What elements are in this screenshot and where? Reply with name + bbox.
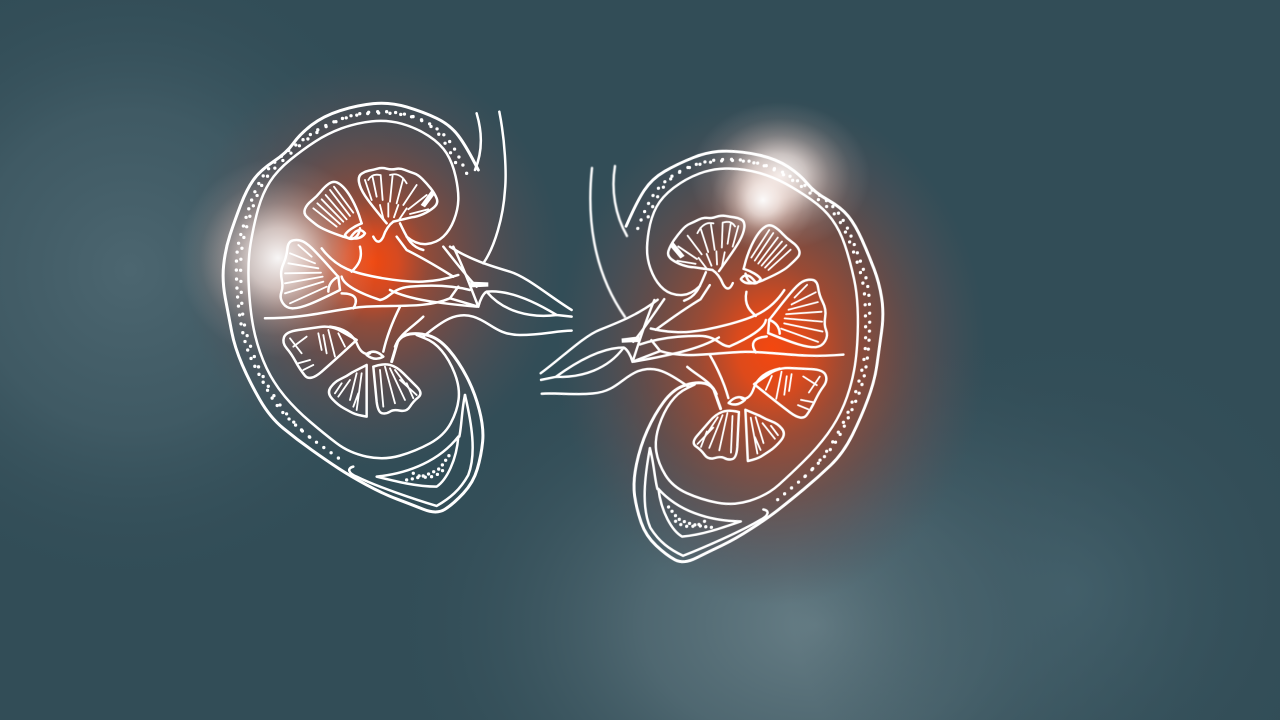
left kidney line art <box>223 103 572 512</box>
left kidney white hot spot <box>178 158 378 358</box>
right kidney ureter lines <box>590 166 627 317</box>
left kidney ureter lines <box>475 112 506 263</box>
right kidney white hot spot <box>711 148 815 252</box>
right kidney upper white halo <box>690 102 870 250</box>
right kidney line art <box>531 138 894 574</box>
